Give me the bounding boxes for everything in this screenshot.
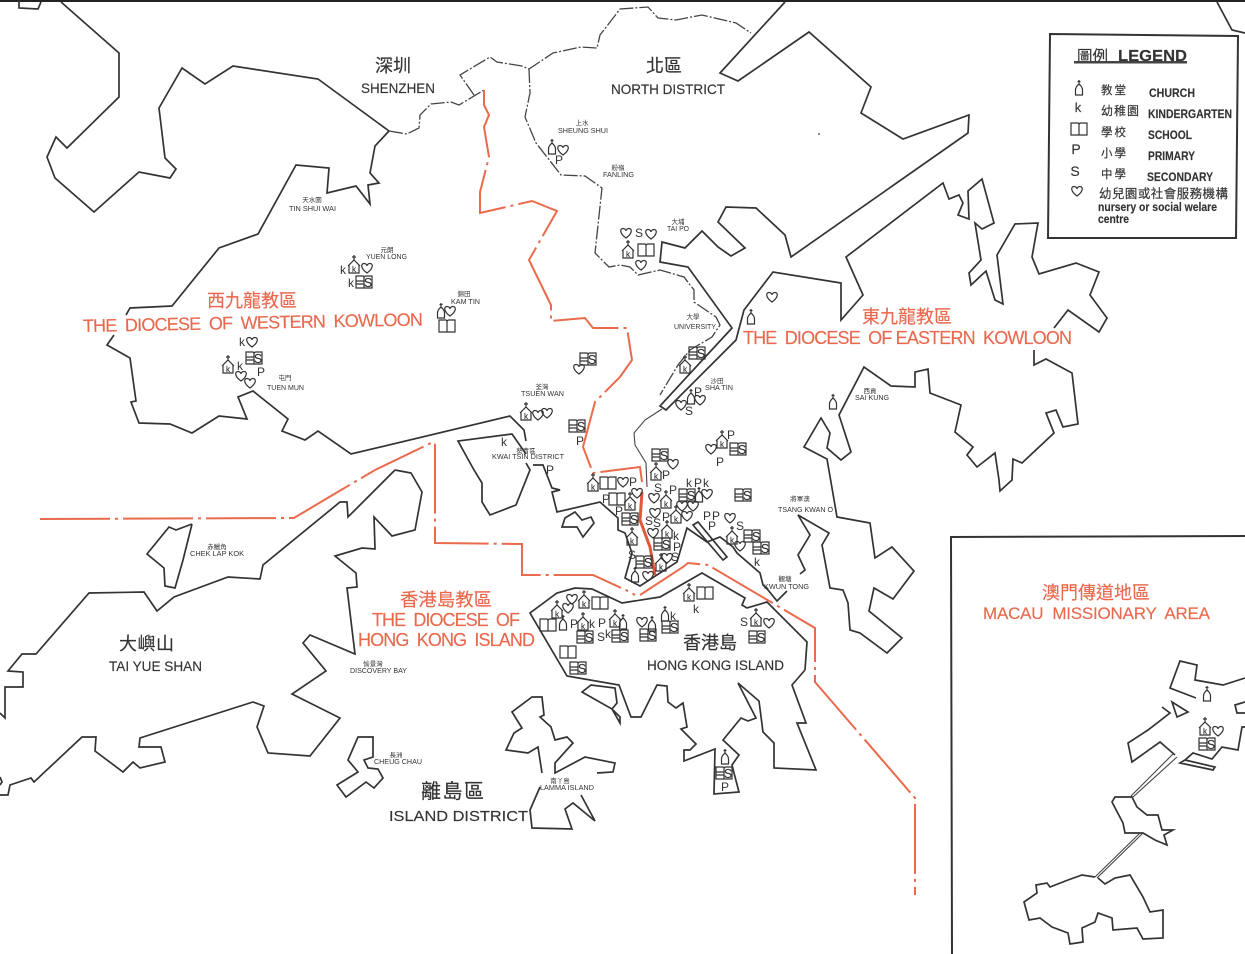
heading: Diocese of Hong Kong Island: THE DIOCESE OF xyxy=(372,610,520,630)
place: Discovery Bay: 愉景灣 xyxy=(363,658,383,668)
icons: Kwun Tong cluster xyxy=(703,509,769,569)
Coloane xyxy=(1024,875,1163,944)
legend row: school xyxy=(1071,123,1192,142)
heading: Tai Yue Shan: 大嶼山 xyxy=(119,630,174,656)
icons: Hong Kong Island north-west cluster: P xyxy=(598,616,606,630)
icons: Kwun Tong cluster: P xyxy=(712,509,720,523)
outline: small island off Kowloon xyxy=(562,512,594,537)
legend row: secondary xyxy=(1070,163,1213,184)
place: Fanling xyxy=(603,162,634,179)
place: Tseung Kwan O: 將軍澳 xyxy=(790,493,810,503)
Taipa xyxy=(1112,797,1173,845)
place: University: 大學 xyxy=(686,311,700,321)
place: University: UNIVERSITY xyxy=(674,324,716,331)
Macau peninsula west xyxy=(1128,707,1175,762)
heading: Diocese of Western Kowloon: THE DIOCESE OF WESTERN KOWLOON xyxy=(83,309,423,336)
legend title: LEGEND xyxy=(1118,48,1187,65)
place: Yuen Long: YUEN LONG xyxy=(366,254,407,261)
icons: Kwun Tong cluster: P xyxy=(708,519,716,533)
paper speck xyxy=(818,133,820,135)
Macau peninsula south xyxy=(1180,727,1245,770)
icons: Tsuen Wan cluster: k xyxy=(501,435,508,449)
icons: Wong Tai Sin cluster: P xyxy=(727,428,735,442)
icons: Kowloon central cluster: S xyxy=(628,548,636,562)
legend row: nursery or social welfare centre: 幼兒園或社會服務機構 xyxy=(1099,183,1228,202)
heading: Island District xyxy=(389,775,528,825)
Macau peninsula north xyxy=(1170,661,1245,698)
icons: Kowloon central cluster xyxy=(587,449,712,582)
place: Kwai Tsing District xyxy=(492,445,565,461)
legend box xyxy=(1048,34,1238,238)
place: Kwai Tsing District: KWAI TSIN DISTRICT xyxy=(492,454,565,461)
legend row: kindergarten: k xyxy=(1075,100,1082,115)
outline: north district curve xyxy=(525,69,720,395)
icons: Tsuen Wan cluster xyxy=(501,353,596,477)
place: Chek Lap Kok: 赤鱲角 xyxy=(207,541,227,551)
place: Tuen Mun: TUEN MUN xyxy=(267,385,304,392)
outline: Lantau island xyxy=(0,470,422,795)
place: Cheung Chau xyxy=(374,749,422,766)
place: Lamma Island: LAMMA ISLAND xyxy=(540,785,594,792)
heading: Macau Missionary Area: 澳門傳道地區 xyxy=(1042,579,1150,605)
place: Tuen Mun xyxy=(267,372,304,392)
icons: Kowloon central cluster: k xyxy=(703,476,710,490)
legend row: nursery or social welfare centre: nursery or social welare xyxy=(1098,202,1217,214)
icons: Kowloon central cluster: k xyxy=(686,476,693,490)
heading: Island District: ISLAND DISTRICT xyxy=(389,808,528,825)
panel: Macau inset xyxy=(951,536,1245,954)
icons: Yuen Long cluster: k xyxy=(340,263,347,277)
Macau east inlet xyxy=(1235,702,1245,713)
place: Tseung Kwan O xyxy=(778,493,834,514)
outline: Hong Kong Island xyxy=(530,573,816,794)
place: Kwun Tong xyxy=(764,573,809,591)
heading: Shenzhen: SHENZHEN xyxy=(361,80,435,96)
heading: North District: NORTH DISTRICT xyxy=(611,81,725,97)
legend row: kindergarten xyxy=(1075,100,1232,121)
place: Tseung Kwan O: TSANG KWAN O xyxy=(778,507,834,514)
outline: Sha Tin channel curve xyxy=(634,409,662,487)
heading: Hong Kong Island: HONG KONG ISLAND xyxy=(647,658,784,673)
place: Sha Tin: SHA TIN xyxy=(705,385,733,392)
icons: Tai Po cluster xyxy=(621,226,656,270)
place: Tin Shui Wai xyxy=(289,194,336,213)
outline: Lamma island south xyxy=(530,787,595,829)
icons: Sheung Shui cluster: P xyxy=(555,153,563,167)
outline: Cheung Chau xyxy=(337,737,383,797)
icons: Wong Tai Sin cluster: P xyxy=(716,455,724,469)
boundary: Hong Kong Island harbour and sea xyxy=(640,563,915,895)
place: Cheung Chau: 長洲 xyxy=(390,749,402,759)
icons: Macau cluster xyxy=(1199,686,1223,752)
bridge to Taipa xyxy=(1131,754,1177,797)
legend row: church xyxy=(1076,80,1195,100)
heading: Shenzhen: 深圳 xyxy=(375,52,411,78)
Macau inner harbour islet xyxy=(1172,702,1188,717)
outline: top-left fragment xyxy=(19,0,41,9)
place: Tai Po: TAI PO xyxy=(667,226,690,233)
heading: Diocese of Hong Kong Island: 香港島教區 xyxy=(400,586,492,612)
place: Sheung Shui: SHEUNG SHUI xyxy=(558,128,608,135)
legend row: secondary: SECONDARY xyxy=(1147,170,1213,184)
icons: Yuen Long cluster: k xyxy=(348,276,355,290)
icons: Tuen Mun cluster: P xyxy=(257,365,265,379)
icons: Tuen Mun cluster xyxy=(222,335,265,388)
outline: western New Territories xyxy=(126,131,389,315)
heading: Diocese of Eastern Kowloon: THE DIOCESE OF EASTERN KOWLOON xyxy=(743,328,1072,348)
icons: Kwun Tong cluster: P xyxy=(703,509,711,523)
outline: western New Territories south coast xyxy=(107,335,526,454)
place: Sheung Shui xyxy=(558,117,608,135)
place: Chek Lap Kok: CHEK LAP KOK xyxy=(190,551,244,558)
icons: Kowloon central cluster: P xyxy=(602,492,610,506)
legend row: primary: 小學 xyxy=(1101,145,1126,161)
icons: Kowloon central cluster: P xyxy=(662,468,670,482)
icons: Hong Kong Island north-west cluster: S xyxy=(597,630,605,644)
place: Tin Shui Wai: TIN SHUI WAI xyxy=(289,206,336,213)
place: Cheung Chau: CHEUG CHAU xyxy=(374,759,422,766)
place: Fanling: 粉嶺 xyxy=(612,162,625,172)
legend row: nursery or social welfare centre xyxy=(1072,183,1228,226)
place: Yuen Long: 元朗 xyxy=(380,244,394,254)
icons: Kwun Tong cluster: k xyxy=(754,555,761,569)
outline: Kowloon breakwater xyxy=(693,522,727,560)
place: Lamma Island xyxy=(540,775,594,792)
place: Tuen Mun: 屯門 xyxy=(278,372,292,382)
boundary: Western and Eastern Kowloon xyxy=(480,90,642,482)
icons: Tsuen Wan cluster: P xyxy=(576,434,584,448)
icons: Kowloon central cluster: S xyxy=(671,550,679,564)
outline: Chek Lap Kok xyxy=(147,524,192,588)
icons: Tai Po cluster: S xyxy=(635,226,643,240)
heading: North District: 北區 xyxy=(646,52,682,78)
icons: Kowloon central cluster: P xyxy=(662,510,670,524)
icons: Tsuen Wan cluster: P xyxy=(546,463,554,477)
heading: Diocese of Western Kowloon xyxy=(83,287,423,336)
outline: top-right corner fragment xyxy=(1217,2,1245,33)
heading: Hong Kong Island xyxy=(647,629,784,673)
heading: Diocese of Hong Kong Island xyxy=(358,586,535,650)
icons: University cluster xyxy=(679,347,705,374)
icons: Hong Kong Island north-west cluster xyxy=(540,590,628,676)
place: Tsuen Wan: 荃灣 xyxy=(536,381,549,391)
icons: Eastern Kowloon cluster xyxy=(748,292,777,324)
legend row: school: 學校 xyxy=(1101,124,1126,140)
place: Sha Tin: 沙田 xyxy=(710,375,724,385)
icons: Kam Tin cluster xyxy=(438,303,455,332)
legend row: secondary: S xyxy=(1070,163,1080,179)
place: Kam Tin: 錦田 xyxy=(458,288,470,298)
outline: border dashed north xyxy=(460,7,751,95)
place: Sai Kung: 西貢 xyxy=(864,385,877,395)
place: Kwai Tsing District: 葵青區 xyxy=(516,445,536,455)
icons: Hong Kong Island east cluster xyxy=(740,608,774,645)
icons: Sha Tin cluster: P xyxy=(694,385,702,399)
legend row: church: 教堂 xyxy=(1101,82,1126,98)
heading: Diocese of Eastern Kowloon xyxy=(743,303,1072,348)
legend title xyxy=(1074,45,1187,66)
place: Sha Tin xyxy=(705,375,733,392)
icons: Kowloon central cluster: P xyxy=(673,540,681,554)
place: Sai Kung: SAI KUNG xyxy=(855,395,889,402)
icons: Hong Kong Island north-west cluster: P xyxy=(570,617,578,631)
inset frame xyxy=(951,536,1245,954)
icons: Hong Kong Island central cluster: k xyxy=(693,602,700,616)
legend row: primary: PRIMARY xyxy=(1148,149,1195,163)
heading: Tai Yue Shan: TAI YUE SHAN xyxy=(109,658,202,674)
heading: Macau Missionary Area: MACAU MISSIONARY AREA xyxy=(983,604,1211,623)
icons: Kowloon central cluster: S xyxy=(653,516,661,530)
panel: legend xyxy=(1048,34,1238,238)
heading: Diocese of Hong Kong Island: HONG KONG ISLAND xyxy=(358,630,535,650)
outline: Lantau north coast xyxy=(0,470,395,718)
outline: Kowloon peninsula xyxy=(533,465,787,601)
region headings xyxy=(83,52,1211,825)
outline: Sai Kung peninsula xyxy=(798,350,1078,653)
icon: Sai Kung church xyxy=(830,394,836,409)
icons: Wong Tai Sin cluster xyxy=(706,428,751,503)
icons: Hong Kong Island central cluster: k xyxy=(670,609,677,623)
legend title: 圖例 xyxy=(1077,45,1108,66)
legend row: primary: P xyxy=(1071,141,1081,157)
legend row: kindergarten: KINDERGARTEN xyxy=(1148,107,1232,121)
heading: Diocese of Eastern Kowloon: 東九龍教區 xyxy=(862,303,952,329)
place: Tsuen Wan: TSUEN WAN xyxy=(521,391,564,398)
icons: Tuen Mun cluster: k xyxy=(239,335,246,349)
icons: Yuen Long cluster xyxy=(340,255,372,290)
icons: Hong Kong Island north-west cluster: k xyxy=(605,627,612,641)
legend row: kindergarten: 幼稚園 xyxy=(1101,102,1139,119)
diocese boundaries xyxy=(40,90,915,895)
place: Tai Po xyxy=(667,216,690,233)
icons: Hong Kong Island north-west cluster: k xyxy=(589,617,596,631)
outline: fragment at left edge xyxy=(0,777,2,785)
icons: Kowloon central cluster: S xyxy=(654,481,662,495)
icons: Tuen Mun cluster: k xyxy=(237,359,244,373)
heading: Macau Missionary Area xyxy=(983,579,1211,623)
place names xyxy=(190,117,889,792)
outline: north-east coast xyxy=(660,2,1107,410)
place: Yuen Long xyxy=(366,244,407,261)
icons: Kwun Tong cluster: S xyxy=(736,519,744,533)
place: Chek Lap Kok xyxy=(190,541,244,558)
place: Sheung Shui: 上水 xyxy=(576,117,589,127)
place: Tin Shui Wai: 天水圍 xyxy=(302,194,322,204)
place: Discovery Bay: DISCOVERY BAY xyxy=(350,668,407,675)
icons: Sheung Shui cluster xyxy=(548,139,568,167)
place: Kam Tin xyxy=(451,288,480,306)
icons: Kowloon central cluster: k xyxy=(673,529,680,543)
legend row: secondary: 中學 xyxy=(1101,166,1126,182)
heading: North District xyxy=(611,52,725,97)
boundary: Western Kowloon and Hong Kong Island xyxy=(40,443,635,595)
heading: Diocese of Western Kowloon: 西九龍教區 xyxy=(207,287,297,313)
legend row: primary xyxy=(1071,141,1195,163)
boundary: thick harbour segment xyxy=(640,492,655,575)
icons: Hong Kong Island east cluster: S xyxy=(740,615,748,629)
icons: Kowloon central cluster: P xyxy=(629,475,637,489)
heading: Island District: 離島區 xyxy=(421,775,484,804)
place: Kam Tin: KAM TIN xyxy=(451,299,480,306)
place: Lamma Island: 南丫島 xyxy=(550,775,570,785)
place: Sai Kung xyxy=(855,385,889,402)
icons: Kowloon central cluster: P xyxy=(615,504,623,518)
place: Tai Po: 大埔 xyxy=(672,216,685,226)
top scan edge xyxy=(0,0,1245,2)
outline: north-west mainland coast xyxy=(47,2,389,212)
place: Kwun Tong: 觀塘 xyxy=(778,573,792,583)
causeway to Coloane xyxy=(1095,833,1143,878)
icons: Hong Kong Island south cluster xyxy=(716,749,732,794)
outline: Kwai Tsing island xyxy=(458,434,530,515)
facility symbols xyxy=(222,139,1223,794)
icons: Hong Kong Island south cluster: P xyxy=(721,780,729,794)
outline: Shenzhen border dashed xyxy=(389,90,484,134)
legend row: school: SCHOOL xyxy=(1148,128,1192,142)
place: Discovery Bay xyxy=(350,658,407,675)
icons: Kowloon central cluster: P xyxy=(669,483,677,497)
place: Kwun Tong: KWUN TONG xyxy=(764,584,809,591)
icons: Sha Tin cluster: S xyxy=(685,404,693,418)
place: University xyxy=(674,311,716,331)
icons: Kowloon central cluster: S xyxy=(645,514,653,528)
heading: Tai Yue Shan xyxy=(109,630,202,674)
place: Tsuen Wan xyxy=(521,381,564,398)
outline: Lamma island north xyxy=(506,697,615,773)
icons: Hong Kong Island central cluster xyxy=(637,583,713,643)
icons: Sha Tin cluster xyxy=(676,385,705,418)
legend row: church: CHURCH xyxy=(1149,86,1195,100)
heading: Hong Kong Island: 香港島 xyxy=(683,629,737,655)
heading: Shenzhen xyxy=(361,52,435,96)
legend row: nursery or social welfare centre: centre xyxy=(1098,214,1129,226)
outline: Ap Lei Chau xyxy=(582,685,620,723)
icons: Kowloon central cluster: P xyxy=(694,476,702,490)
place: Fanling: FANLING xyxy=(603,172,634,179)
